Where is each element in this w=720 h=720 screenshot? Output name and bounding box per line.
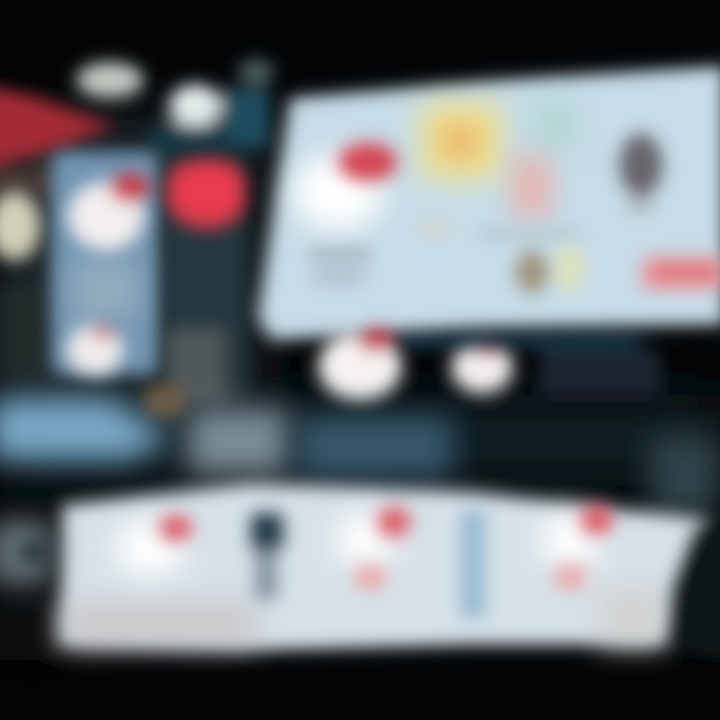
- panel: left blue laptop: [0, 398, 172, 460]
- panel: main light board: [258, 66, 720, 340]
- panel: left tall card: [52, 152, 158, 375]
- icon: left card lower badge: [67, 325, 123, 375]
- icon: dark divider figure: [250, 512, 284, 600]
- icon: red block: [169, 160, 245, 224]
- icon: right sheet badge: [540, 512, 600, 568]
- panel: left red wedge: [0, 85, 115, 195]
- panel: bottom right lower shading: [600, 590, 665, 645]
- panel: bottom left lower shading: [62, 602, 257, 646]
- panel: left yellow glow: [0, 192, 45, 375]
- icon: lower centre badge large: [318, 328, 402, 400]
- icon: yellow sticky note: [422, 104, 500, 178]
- panel: dark centre column: [145, 160, 245, 417]
- panel: right dark object: [650, 435, 720, 515]
- panel: left sheet edge: [0, 520, 52, 585]
- icon: small brown figure: [515, 244, 585, 294]
- icon: grey figure: [619, 133, 663, 212]
- panel: bottom sheet: [60, 484, 712, 650]
- panel: dim strip under board: [400, 335, 660, 394]
- icon: pink figure: [514, 156, 550, 218]
- icon: centre sheet red marks: [353, 506, 411, 590]
- icon: board badge red cap: [338, 142, 398, 182]
- panel: upper left lights: [76, 59, 274, 155]
- panel: centre grey tablet: [188, 408, 288, 474]
- text block: faint centre lines: [420, 220, 580, 240]
- icon: board main badge: [292, 154, 384, 230]
- icon: centre sheet badge: [335, 512, 395, 568]
- icon: right sheet red marks: [553, 505, 614, 590]
- text block: red board label: [642, 256, 720, 290]
- icon: left card upper badge: [68, 173, 150, 250]
- icon: blue sheet divider: [460, 510, 486, 618]
- panel: right dark shape: [672, 510, 720, 660]
- icon: left sheet badge: [114, 520, 186, 576]
- icon: left sheet red cap: [159, 514, 193, 542]
- panel: ambient dark tones: [0, 120, 720, 660]
- panel: centre teal tablet: [298, 416, 453, 478]
- icon: left sheet dark spot: [19, 542, 47, 562]
- text block: grey board lines: [310, 248, 370, 284]
- icon: lower centre badge small: [451, 341, 513, 393]
- icon: teal smudge: [533, 99, 577, 151]
